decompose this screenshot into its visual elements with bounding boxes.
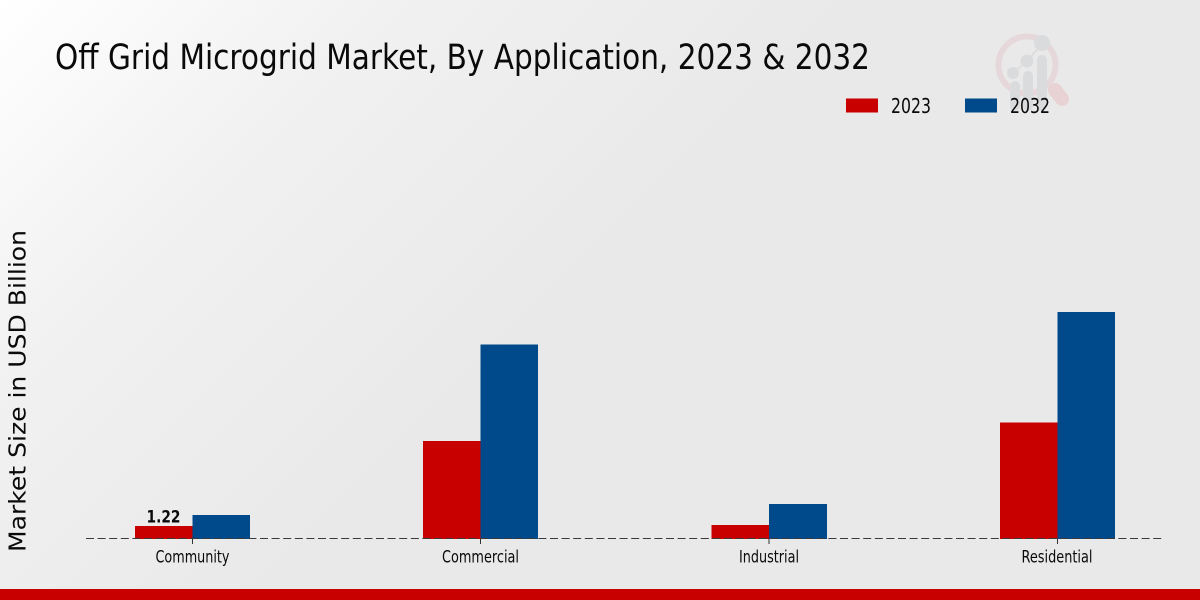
group: Commercial	[423, 344, 538, 566]
group: Commercial: Commercial	[442, 548, 519, 566]
legend item: 2023: 2023	[891, 94, 931, 118]
group: Community	[135, 508, 250, 566]
title: Off Grid Microgrid Market, By Application, 2023 & 2032	[55, 38, 870, 78]
group: Community: 1.22	[146, 508, 180, 528]
bar chart	[86, 312, 1164, 566]
y axis label: Market Size in USD Billion	[4, 230, 32, 552]
group: Community: Community	[156, 548, 230, 566]
group: Industrial	[712, 504, 827, 566]
bottom bar	[0, 589, 1200, 600]
group: Residential: Residential	[1022, 548, 1092, 566]
legend item: 2023	[846, 94, 931, 118]
legend	[846, 94, 1050, 118]
watermark logo	[998, 35, 1062, 111]
legend item: 2032	[965, 94, 1050, 118]
group: Industrial: Industrial	[739, 548, 799, 566]
group: Residential	[1000, 312, 1115, 566]
legend item: 2032: 2032	[1010, 94, 1050, 118]
